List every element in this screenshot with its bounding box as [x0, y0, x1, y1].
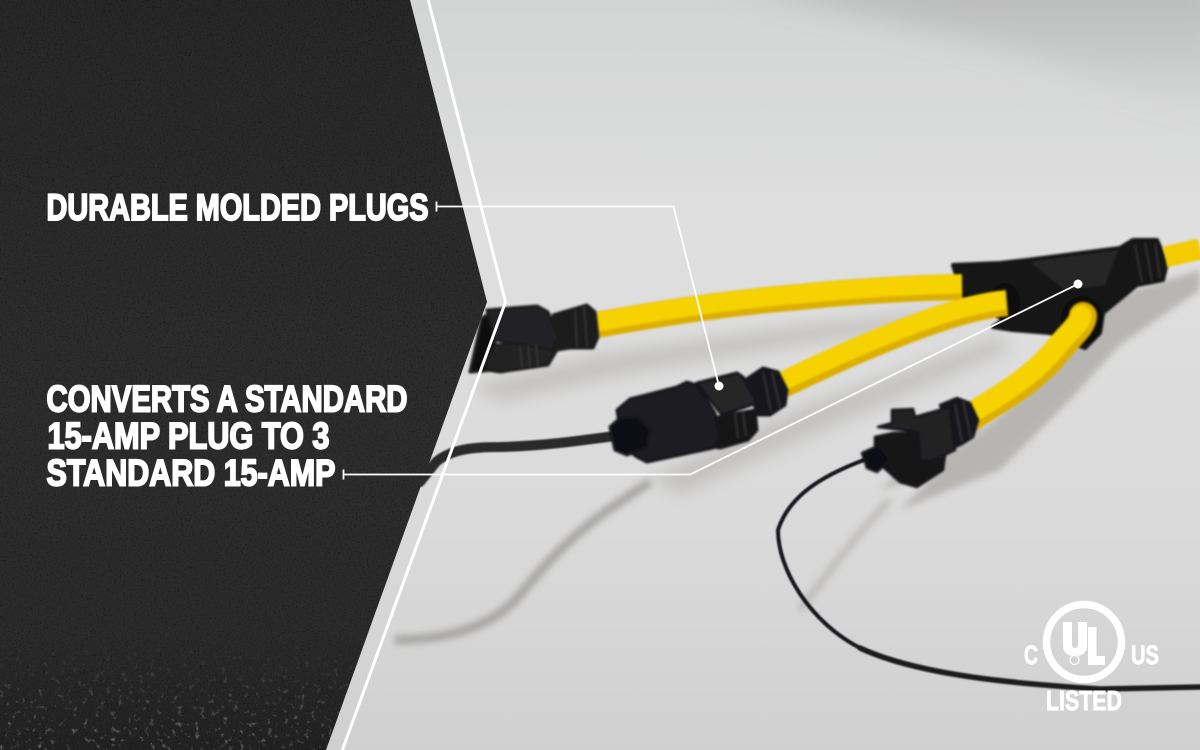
photo: cast shadows on floor: [395, 270, 1200, 640]
heading: converts a standard plug: [46, 378, 408, 494]
dark panel with chevron edge: [0, 0, 490, 750]
heading: converts a standard plug: STANDARD 15-AMP: [46, 452, 336, 494]
icon: UL listed mark: C: [1024, 640, 1038, 670]
icon: UL listed mark: US: [1131, 640, 1159, 670]
callout leader: durable molded plugs: [436, 202, 724, 390]
callout leader: plug conversion: [344, 280, 1082, 480]
photo: thin black cords: [420, 436, 1200, 689]
photo: middle plug: [610, 368, 787, 462]
icon: UL listed mark: LISTED: [1046, 685, 1122, 716]
heading: converts a standard plug: CONVERTS A STANDARD: [46, 378, 408, 420]
photo: left plug: [470, 305, 598, 372]
photo: yellow power cables: [597, 249, 1200, 417]
heading: converts a standard plug: 15-AMP PLUG TO 3: [48, 416, 330, 456]
chevron outline: [342, 0, 506, 750]
photo: right plug: [862, 398, 978, 487]
heading: durable molded plugs: DURABLE MOLDED PLUGS: [46, 187, 428, 228]
photo: Y-splitter body: [953, 240, 1167, 348]
icon: UL listed mark: [1024, 604, 1159, 716]
